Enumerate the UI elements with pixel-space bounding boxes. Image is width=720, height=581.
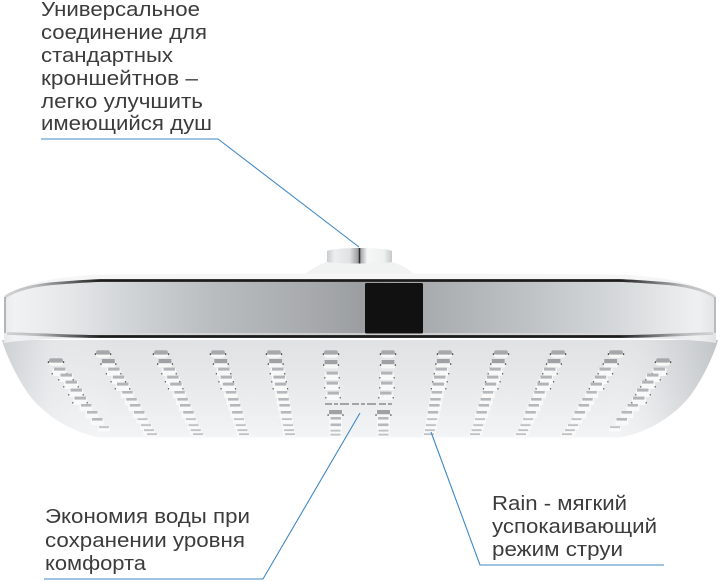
band lower highlight	[100, 333, 620, 335]
leader line: rain mode	[431, 432, 664, 565]
row 6	[323, 350, 344, 439]
nozzles	[48, 350, 671, 439]
black square on band	[365, 283, 423, 334]
text: universal connection: легко улучшить	[41, 91, 203, 113]
row 3	[153, 350, 204, 438]
top white rim	[4, 274, 716, 302]
band top edge	[5, 280, 715, 297]
underside of the head	[2, 340, 718, 438]
text: water saving: комфорта	[45, 553, 147, 575]
row 5	[266, 350, 296, 438]
text: rain mode: режим струи	[492, 539, 623, 561]
connector chrome cylinder	[327, 248, 392, 264]
text: universal connection	[41, 0, 212, 135]
text: universal connection: кроншейтнов –	[41, 68, 199, 90]
nozzle rows, left half	[48, 350, 344, 439]
text: water saving: Экономия воды при	[45, 506, 250, 528]
band bottom edge	[7, 334, 713, 336]
text: water saving: сохранении уровня	[45, 530, 245, 552]
text: rain mode	[492, 493, 657, 561]
leader line: water saving	[44, 413, 360, 579]
row 1	[48, 358, 110, 432]
row 4	[210, 350, 250, 438]
nozzle rows, right half	[375, 350, 671, 439]
text: universal connection: стандартных	[41, 45, 173, 67]
left band edge	[4, 297, 6, 333]
text: rain mode: Rain - мягкий	[492, 493, 627, 515]
logo mark	[325, 403, 392, 405]
right band edge	[714, 297, 716, 333]
text: rain mode: успокаивающий	[492, 516, 657, 538]
connector base dome	[305, 262, 414, 274]
row 2	[95, 350, 158, 438]
text: water saving	[45, 506, 250, 575]
leader line: connection	[41, 139, 359, 247]
text: universal connection: соединение для	[41, 22, 207, 44]
underside side shading	[2, 340, 718, 438]
chrome band	[4, 281, 716, 343]
shower head	[2, 248, 718, 439]
text: universal connection: имеющийся душ	[41, 113, 212, 135]
